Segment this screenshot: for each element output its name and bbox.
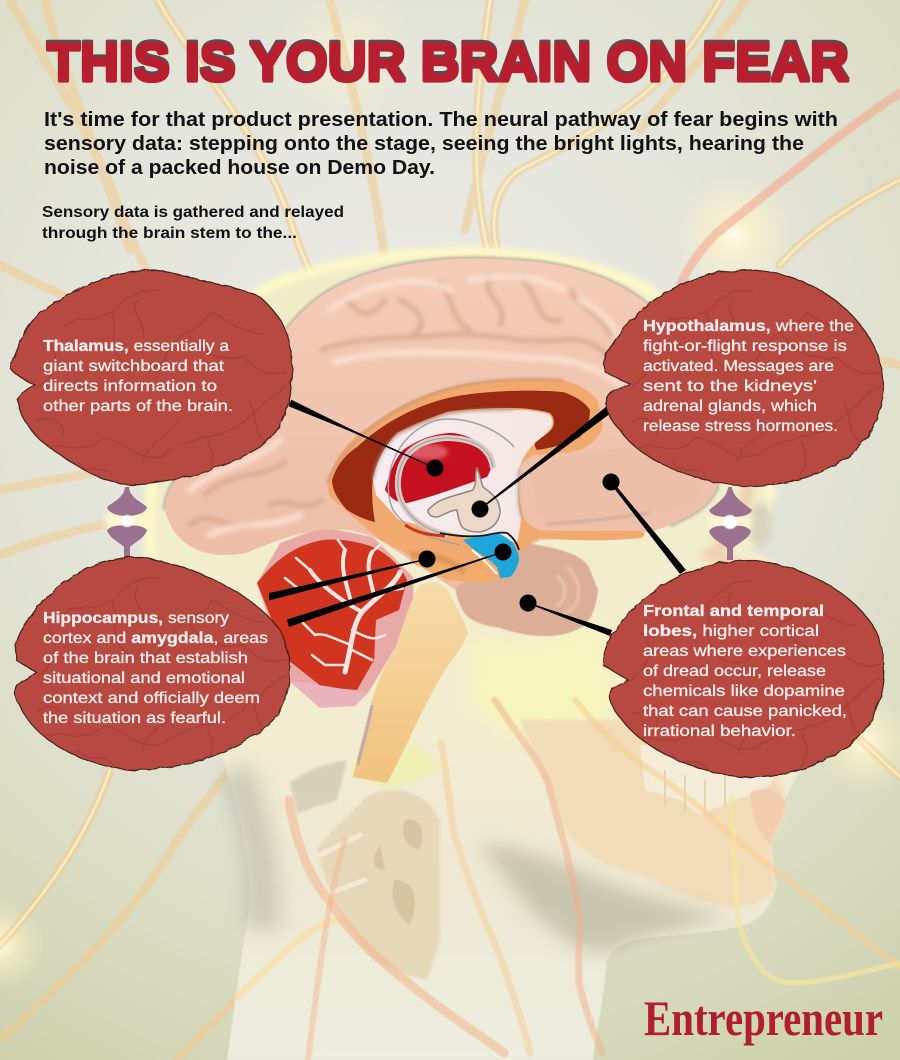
skull glow (149, 252, 772, 560)
frontal and temporal lobes text: of dread occur, release (643, 663, 826, 680)
hippocampus orange (410, 550, 493, 583)
connector: frontal lobe upper (610, 481, 686, 574)
panel: thalamus (10, 270, 292, 485)
title: THIS IS YOUR BRAIN ON FEAR (47, 30, 849, 90)
hippocampus text: the situation as fearful. (43, 710, 226, 727)
hypothalamus text: release stress hormones. (643, 418, 838, 435)
cerebellum white tree (285, 540, 402, 672)
hippocampus text: cortex and amygdala , areas (43, 630, 262, 647)
hypothalamus text: activated. Messages are (643, 358, 834, 375)
cervical spine (290, 760, 440, 980)
frontal and temporal lobes text: chemicals like dopamine (643, 683, 845, 700)
sensory data note: through the brain stem to the... (42, 225, 297, 242)
hypothalamus text: adrenal glands, which (643, 398, 817, 415)
hippocampus text: situational and emotional (43, 670, 245, 687)
thalamus text: Thalamus, essentially a (43, 338, 221, 355)
intro paragraph: noise of a packed house on Demo Day. (44, 156, 435, 179)
intro paragraph: It's time for that product presentation. The neural pathway of fear begins with (44, 108, 838, 131)
panel: hippocampus (15, 557, 290, 770)
amygdala blue (463, 533, 519, 578)
temple shading (748, 503, 772, 547)
illustration: brain cross-section (165, 258, 719, 790)
fornix ring (398, 438, 493, 535)
hypothalamus text: Hypothalamus, where the (643, 318, 845, 335)
throat shadow (480, 840, 727, 953)
nerves over neck (237, 700, 900, 1060)
hippocampus text: Hippocampus, sensory (43, 610, 224, 627)
temporal lobe (456, 543, 598, 636)
head and neck silhouette (149, 252, 860, 1060)
title: THIS IS YOUR BRAIN ON FEAR (47, 33, 849, 93)
frontal and temporal lobes text: that can cause panicked, (643, 703, 847, 720)
hypothalamus text: sent to the kidneys' (643, 378, 817, 395)
thalamus red (385, 433, 493, 503)
lower lip and teeth (640, 745, 790, 845)
brain stem glow (350, 745, 440, 790)
cerebellum lobes (257, 539, 407, 690)
interior white (373, 410, 552, 542)
marker dots (418, 460, 620, 612)
intro paragraph (44, 108, 838, 179)
connector: hippocampus (269, 558, 427, 600)
frontal and temporal lobes text: areas where experiences (643, 643, 846, 660)
cingulate orange ring (327, 379, 644, 583)
synapse icon: left (105, 487, 149, 557)
gyri (190, 275, 630, 535)
cerebellar striations (288, 680, 368, 708)
connector: thalamus (289, 400, 435, 468)
sensory data note: Sensory data is gathered and relayed (42, 204, 344, 221)
panel: hypothalamus (604, 270, 883, 486)
frontal and temporal lobes text: irrational behavior. (643, 723, 796, 740)
connector: hypothalamus (480, 405, 613, 510)
frontal and temporal lobes text: lobes, higher cortical (643, 623, 801, 640)
connector: amygdala (287, 552, 503, 627)
hypothalamus text: fight-or-flight response is (643, 338, 847, 355)
thalamus text: giant switchboard that (43, 358, 225, 375)
brow shading (710, 480, 800, 590)
brain stem (353, 582, 468, 783)
corpus callosum (332, 391, 590, 522)
neck back shading (235, 770, 263, 930)
sensory data note (42, 204, 344, 242)
cerebellum halo (257, 527, 414, 697)
jaw and chin (520, 720, 786, 907)
hippocampus text: of the brain that establish (43, 650, 248, 667)
intro paragraph: sensory data: stepping onto the stage, seeing the bright lights, hearing the (44, 132, 804, 155)
hypothalamus hook (428, 468, 500, 532)
frontal lower lobe (530, 448, 700, 520)
cerebrum outline shadow (165, 258, 719, 525)
panel: frontal and temporal lobes (603, 560, 884, 777)
connector: temporal lobe (528, 602, 612, 636)
yellow glow under brain (470, 620, 620, 740)
thalamus text: directs information to (43, 378, 217, 395)
hippocampus text: context and officially deem (43, 690, 260, 707)
frontal and temporal lobes text: Frontal and temporal (643, 603, 824, 620)
thalamus text: other parts of the brain. (43, 398, 233, 415)
cerebrum (165, 258, 719, 590)
synapse icon: right (708, 487, 752, 560)
